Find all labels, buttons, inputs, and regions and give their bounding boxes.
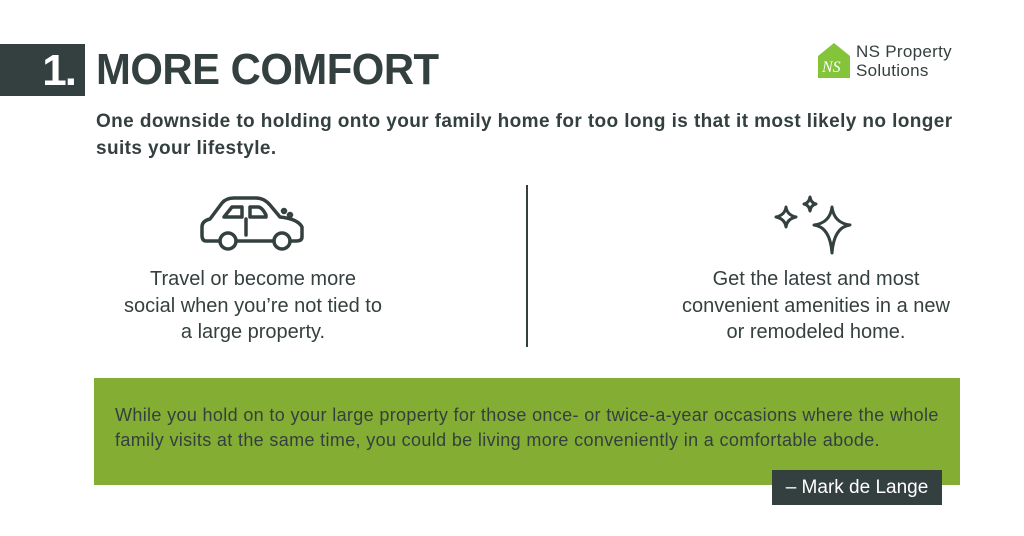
text: amenities: Get the latest and most convenient amenities in a new or remodeled home. <box>682 268 950 343</box>
logo: NS Property <box>856 42 952 61</box>
number badge <box>0 44 85 96</box>
author tag <box>772 470 942 505</box>
logo <box>818 42 952 80</box>
subtitle: One downside to holding onto your family home for too long is that it most likely no longer suits your lifestyle. <box>96 111 953 159</box>
divider <box>526 185 528 347</box>
logo: NS <box>821 59 841 76</box>
quote text: While you hold on to your large property for those once- or twice-a-year occasions where the whole family visits at the same time, you could be living more conveniently in a comfortable abode. <box>115 405 939 450</box>
logo: Solutions <box>856 61 929 80</box>
icon: car <box>200 196 304 251</box>
icon: sparkles <box>774 196 852 254</box>
quote panel <box>94 378 960 485</box>
text: travel: Travel or become more social when you’re not tied to a large property. <box>124 268 382 343</box>
number badge: 1. <box>42 46 75 95</box>
title: MORE COMFORT <box>96 45 439 94</box>
author tag: – Mark de Lange <box>786 477 928 498</box>
